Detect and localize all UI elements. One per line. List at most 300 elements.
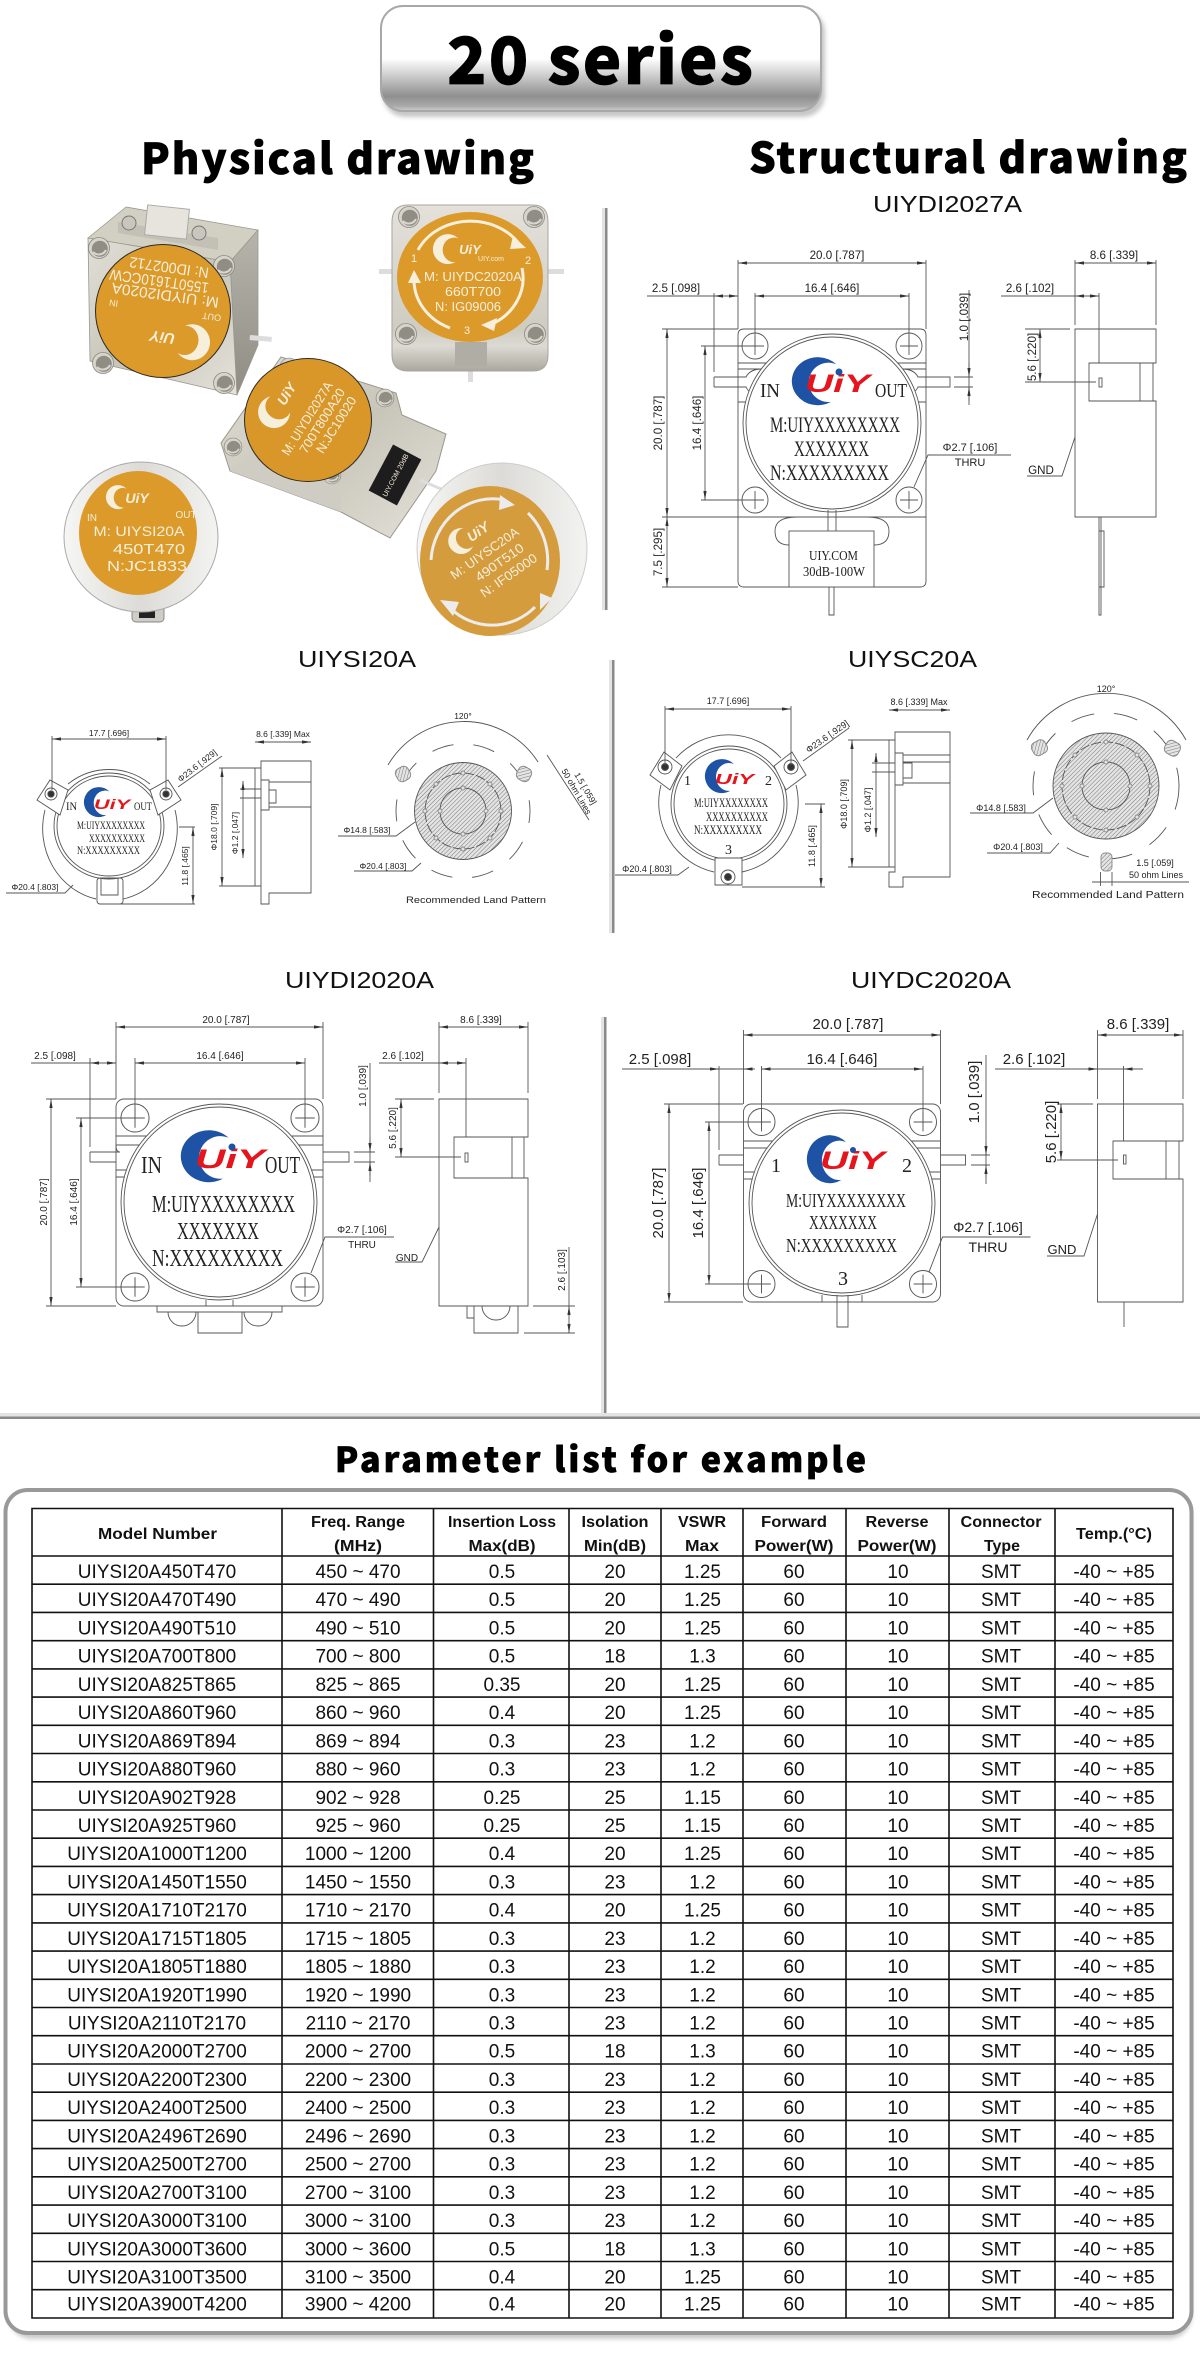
table: data rows: 60 [783,1872,805,1893]
table: data rows: 60 [783,1562,805,1583]
table: data rows: 1.2 [689,1929,716,1950]
table: data rows: -40 ~ +85 [1073,2239,1155,2260]
table: data rows: 825 ~ 865 [315,1675,401,1696]
drawing: UIYDI2027A: Φ2.7 [.106] [943,442,997,454]
table: data rows: 10 [887,2014,909,2034]
table: data rows: UIYSI20A2700T3100 [67,2183,247,2204]
table: data rows: -40 ~ +85 [1073,1788,1155,1809]
table: data rows: -40 ~ +85 [1073,1844,1155,1865]
drawing: UIYDI2027A: 8.6 [.339] [1090,249,1138,262]
table: data rows: -40 ~ +85 [1073,1901,1155,1922]
table: data rows: 60 [783,2183,805,2204]
table: data rows: 1.15 [684,1788,721,1809]
table: data rows: -40 ~ +85 [1073,1731,1155,1752]
table: data rows: 10 [887,1844,909,1865]
marking text: XXXXXXX [177,1219,259,1245]
table: header row: Isolation [582,1514,648,1531]
table: data rows: -40 ~ +85 [1073,1675,1155,1696]
table: data rows: UIYSI20A470T490 [78,1590,236,1611]
table: data rows: 10 [887,1788,909,1809]
heading: physical drawing: Physical drawing [141,126,534,187]
drawing: UIYDI2020A: GND [396,1253,418,1264]
table: data rows: -40 ~ +85 [1073,1618,1155,1639]
drawing: UIYSI20A: Recommended Land Pattern [406,894,546,905]
table: data rows: -40 ~ +85 [1073,2098,1155,2119]
table: data rows: UIYSI20A925T960 [78,1816,236,1837]
table: data rows: UIYSI20A1000T1200 [67,1844,247,1865]
marking text: XXXXXXX [794,436,869,461]
table: header row: VSWR [678,1514,726,1531]
table: data rows: 1.25 [684,1844,721,1865]
table: data rows: 23 [604,1731,626,1752]
drawing: UIYDC2020A: 8.6 [.339] [1107,1016,1169,1033]
table: data rows: UIYSI20A869T894 [78,1731,237,1752]
table: header row: Max [685,1538,719,1555]
table: data rows: 20 [604,1844,626,1865]
logo: UiY [94,796,133,812]
drawing: UIYDI2020A: 1.0 [.039] [358,1065,369,1107]
drawing: UIYDI2020A: THRU [348,1240,376,1251]
photo: UIYSC20A circulator: M: UIYSC20A [447,524,522,582]
drawing: UIYDI2027A [647,249,1156,615]
table: data rows: 0.3 [489,1985,515,2006]
table: data rows: 23 [604,1957,626,1978]
table: data rows: 23 [604,2211,626,2232]
marking text: IN [141,1153,162,1179]
table: data rows: 10 [887,2098,909,2119]
drawing: UIYSC20A: 1.5 [.059] [1136,858,1174,868]
table: data rows: 1710 ~ 2170 [305,1901,411,1922]
table: data rows: 1.25 [684,2268,721,2288]
logo: UiY [805,370,874,398]
table: header row: Freq. Range [311,1514,405,1531]
table: data rows: -40 ~ +85 [1073,1590,1155,1611]
drawing: UIYDI2020A: 16.4 [.646] [69,1178,80,1226]
table: data rows: 1.25 [684,2294,721,2316]
table: data rows: -40 ~ +85 [1073,1562,1155,1583]
table: data rows: -40 ~ +85 [1073,1703,1155,1724]
marking text: M:UIYXXXXXXXX [77,818,145,832]
table: data rows: 0.3 [489,2126,515,2147]
label: UIYDI2027A: UIYDI2027A [873,191,1023,217]
table: data rows: UIYSI20A3100T3500 [67,2268,247,2288]
photo: UIYDI2020A isolator [88,205,272,395]
photo: UIYSC20A circulator: UiY [464,517,493,545]
table: data rows: 1.3 [689,1647,716,1668]
table: data rows: 60 [783,2042,805,2063]
marking text: UIY.COM [809,549,858,564]
table: data rows: 18 [604,2042,626,2063]
table: data rows: 1.15 [684,1816,721,1837]
drawing: UIYDI2027A: 16.4 [.646] [805,282,859,295]
table: data rows: 0.4 [489,2294,516,2316]
photo: UIYDC2020A circulator: 1 [411,253,417,265]
table: data rows: 23 [604,2155,626,2176]
table: data rows: SMT [981,2126,1021,2147]
photo: UIYDI2020A isolator: M: UIYDI2020A [111,279,220,311]
table: data rows: -40 ~ +85 [1073,2268,1155,2288]
table: data rows: 20 [604,1901,626,1922]
table: data rows: 23 [604,2126,626,2147]
table: data rows: 1805 ~ 1880 [305,1957,411,1978]
table: data rows: 1.25 [684,1675,721,1696]
table: data rows: 25 [604,1788,626,1809]
drawing: UIYDC2020A: Φ2.7 [.106] [953,1219,1023,1235]
table: data rows: 2500 ~ 2700 [305,2155,411,2176]
marking text [771,1155,912,1290]
table: header row: Min(dB) [584,1538,646,1555]
table: data rows: 0.3 [489,1929,515,1950]
table: data rows: SMT [981,2070,1021,2091]
title button [381,6,825,117]
marking text [66,799,152,857]
label: UIYDC2020A: UIYDC2020A [851,967,1012,993]
photo: UIYDI2020A isolator: IN [108,297,119,309]
table: data rows: SMT [981,1760,1021,1780]
photo: UIYSI20A isolator: IN [87,513,97,524]
photo: UIYDI2020A isolator: N: ID002712 [128,253,210,281]
table: header row: Temp.(°C) [1076,1526,1152,1543]
photo: UIYDC2020A circulator: M: UIYDC2020A [424,269,522,284]
table: data rows: 20 [604,1618,626,1639]
table: data rows: 60 [783,2098,805,2119]
photo: UIYSC20A circulator: 490T510 [472,540,527,585]
marking text: 1 [684,774,691,789]
table: data rows: 0.4 [489,1844,516,1865]
table: data rows: -40 ~ +85 [1073,2070,1155,2091]
marking text: XXXXXXXXXX [706,809,768,824]
marking text [760,380,907,580]
table: data rows: 0.25 [484,1816,520,1837]
drawing: UIYSI20A: Φ20.4 [.803] [360,861,406,871]
drawing: UIYSI20A: 17.7 [.696] [89,728,129,738]
drawing: UIYDC2020A: 1.0 [.039] [966,1061,983,1123]
table: data rows: 2000 ~ 2700 [305,2042,411,2063]
table: data rows: 1.2 [689,1760,716,1780]
table: data rows: UIYSI20A1715T1805 [67,1929,247,1950]
table: data rows: 10 [887,1731,909,1752]
table: data rows: 1.2 [689,1985,716,2006]
marking text [684,774,772,858]
table: data rows: 60 [783,1901,805,1922]
table: data rows: 1.2 [689,1872,716,1893]
table: data rows: 60 [783,1618,805,1639]
marking text: M:UIYXXXXXXXX [770,412,900,437]
table: grid lines [32,1508,1173,2318]
table: data rows: SMT [981,2098,1021,2119]
photo: UIYDI2020A isolator: 1550T1610CCW [108,265,210,296]
photo: UIYSI20A isolator [64,462,218,622]
table: data rows: UIYSI20A2110T2170 [68,2014,246,2034]
table: data rows: SMT [981,1872,1021,1893]
logo: UiY [715,771,757,788]
table: header row: Power(W) [754,1538,834,1555]
table: data rows: 0.5 [489,1562,515,1583]
photo: UIYDC2020A circulator: 3 [464,325,470,337]
table: data rows: 23 [604,2014,626,2034]
table: data rows: 60 [783,2211,805,2232]
logo [807,1135,889,1183]
drawing: UIYSI20A [6,711,599,905]
drawing: UIYDI2027A: 2.6 [.102] [1006,282,1054,295]
table: data rows: 60 [783,1647,805,1668]
drawing: UIYSI20A: Φ23.6 [.929] [176,747,219,784]
drawing: UIYSI20A: 120° [454,711,472,721]
table: data rows: 10 [887,2239,909,2260]
marking text: N:XXXXXXXXX [152,1246,283,1272]
table: data rows: 60 [783,1703,805,1724]
table: data rows: 0.4 [489,1703,516,1724]
marking text: N:XXXXXXXXX [77,843,140,857]
table: data rows: SMT [981,1590,1021,1611]
table: data rows: 60 [783,1788,805,1809]
photo: UIYDC2020A circulator [379,205,564,382]
table: data rows: 1.2 [689,1731,716,1752]
table: data rows: 60 [783,2268,805,2288]
table: data rows: 1920 ~ 1990 [305,1985,411,2006]
drawing: UIYDC2020A: 2.5 [.098] [629,1051,691,1068]
table: header row: Connector [960,1514,1042,1531]
table: data rows: 1.2 [689,2070,716,2091]
table: data rows: 20 [604,2268,626,2288]
table: data rows: 902 ~ 928 [315,1788,401,1809]
drawing: UIYSC20A: Recommended Land Pattern [1032,890,1184,901]
table: data rows: 18 [604,2239,626,2260]
table: data rows: UIYSI20A1450T1550 [67,1872,247,1893]
drawing: UIYDI2027A: 1.0 [.039] [958,293,971,341]
table: data rows: 0.3 [489,2098,515,2119]
drawing: UIYSC20A: 8.6 [.339] Max [890,697,948,707]
marking text: M:UIYXXXXXXXX [694,795,768,810]
table: data rows: 1.25 [684,1618,721,1639]
table: data rows: 60 [783,1985,805,2006]
table: data rows: 860 ~ 960 [315,1703,401,1724]
table: data rows: UIYSI20A825T865 [78,1675,236,1696]
table: data rows: 23 [604,2183,626,2204]
table: data rows: 10 [887,1901,909,1922]
drawing: UIYDC2020A: 16.4 [.646] [690,1168,707,1238]
marking text: XXXXXXXXXX [89,831,145,845]
drawing: UIYSC20A: Φ1.2 [.047] [863,788,873,832]
drawing: UIYDI2020A: 8.6 [.339] [460,1015,502,1026]
marking text: OUT [265,1153,300,1179]
table: data rows: -40 ~ +85 [1073,2042,1155,2063]
table: data rows: 18 [604,1647,626,1668]
drawing: UIYDI2020A: 5.6 [.220] [388,1107,399,1149]
table: data rows: UIYSI20A2500T2700 [67,2155,247,2176]
table: data rows: 700 ~ 800 [315,1647,401,1668]
table: data rows: 0.3 [489,2183,515,2204]
drawing: UIYSI20A: Φ20.4 [.803] [12,882,58,892]
drawing: UIYSC20A [615,684,1189,901]
table: data rows: -40 ~ +85 [1073,1647,1155,1668]
table: data rows: 3900 ~ 4200 [305,2294,411,2316]
table: data rows: 1.3 [689,2239,716,2260]
table: data rows: 880 ~ 960 [315,1760,401,1780]
table: data rows: 60 [783,2014,805,2034]
table: data rows: 1715 ~ 1805 [305,1929,411,1950]
table: data rows: 10 [887,1957,909,1978]
logo: UiY [820,1147,889,1175]
table: data rows: 2496 ~ 2690 [305,2126,411,2147]
drawing: UIYDI2027A: THRU [955,457,985,469]
table: data rows: 0.3 [489,2014,515,2034]
drawing: UIYDI2027A: GND [1028,464,1054,477]
table: data rows: 1.2 [689,1957,716,1978]
table: data rows: 10 [887,2268,909,2288]
drawing: UIYSC20A: Φ20.4 [.803] [622,864,672,874]
table: data rows: 1.2 [689,2126,716,2147]
table: data rows: 0.5 [489,2042,515,2063]
marking text: 2 [765,774,772,789]
table: data rows: 0.5 [489,1590,515,1611]
drawing: UIYDI2027A: 16.4 [.646] [691,396,704,450]
photo: UIYDC2020A circulator: N: IG09006 [435,299,501,314]
marking text: IN [66,799,77,813]
logo [84,787,133,817]
table: data rows: 60 [783,1675,805,1696]
marking text: XXXXXXX [809,1212,877,1234]
table: data rows: -40 ~ +85 [1073,2211,1155,2232]
table: data rows: 1.2 [689,2183,716,2204]
table: data rows: 1000 ~ 1200 [305,1844,411,1865]
photo: UIYSI20A isolator: OUT [175,510,197,521]
table: data rows: 25 [604,1816,626,1837]
table: data rows: SMT [981,1675,1021,1696]
table: data rows: 23 [604,1760,626,1780]
drawing: UIYDI2020A: 16.4 [.646] [196,1051,244,1062]
table: data rows: 10 [887,2042,909,2063]
table: data rows: -40 ~ +85 [1073,2126,1155,2147]
drawing: UIYDC2020A: 5.6 [.220] [1043,1101,1060,1163]
table: data rows: 1.2 [689,2014,716,2034]
marking text: 1 [771,1155,781,1177]
photo: UIYDI2027A isolator with attenuator: UiY [274,378,300,408]
table: data rows [67,1562,1155,2316]
drawing: UIYSI20A: Φ14.8 [.583] [344,825,390,835]
table: data rows: 2110 ~ 2170 [306,2014,410,2034]
photo: UIYSI20A isolator: M: UIYSI20A [94,523,185,539]
table: data rows: 60 [783,1816,805,1837]
heading: parameter list: Parameter list for example [335,1433,866,1482]
table: data rows: 1.25 [684,1901,721,1922]
table: data rows: SMT [981,1562,1021,1583]
drawing: UIYSC20A: 17.7 [.696] [707,696,749,706]
drawing: UIYDC2020A: 20.0 [.787] [650,1168,667,1238]
photo: UIYSI20A isolator: 450T470 [113,541,185,558]
table: data rows: 0.5 [489,2239,515,2260]
table: data rows: 60 [783,2239,805,2260]
table: data rows: UIYSI20A450T470 [78,1562,236,1583]
table: data rows: UIYSI20A3900T4200 [67,2294,247,2316]
table: data rows: 1.25 [684,1703,721,1724]
table: header row: Power(W) [858,1538,936,1555]
table: data rows: 0.4 [489,1901,516,1922]
table: data rows: 0.4 [489,2268,516,2288]
table: data rows: -40 ~ +85 [1073,1760,1155,1780]
drawing: UIYDI2027A: 2.5 [.098] [652,282,700,295]
table: data rows: 2400 ~ 2500 [305,2098,411,2119]
table: data rows: 1450 ~ 1550 [305,1872,411,1893]
photo: UIYSI20A isolator: UiY [125,490,150,506]
table: data rows: -40 ~ +85 [1073,2014,1155,2034]
table: data rows: SMT [981,1788,1021,1809]
drawing: UIYDC2020A: 16.4 [.646] [807,1051,877,1068]
table: data rows: 60 [783,1957,805,1978]
drawing: UIYDI2027A: 20.0 [.787] [810,249,864,262]
photo: UIYDI2027A isolator with attenuator: 700T800A20 [296,385,348,456]
marking text: 3 [838,1268,848,1290]
table: header row: Reverse [866,1514,929,1531]
table: data rows: SMT [981,2042,1021,2063]
table: data rows: 925 ~ 960 [315,1816,401,1837]
table: data rows: UIYSI20A3000T3600 [67,2239,247,2260]
table: data rows: 60 [783,1760,805,1780]
marking text: M:UIYXXXXXXXX [152,1192,295,1218]
table: header row: Max(dB) [468,1538,536,1555]
photo: UIYSC20A circulator [417,463,587,636]
table: data rows: 60 [783,2294,805,2316]
table: header row: Type [984,1538,1020,1555]
drawing: UIYDI2020A [31,1015,575,1333]
label: UIYDI2020A: UIYDI2020A [285,967,435,993]
photo: UIYDC2020A circulator: UiY [459,242,482,257]
table: data rows: 10 [887,1618,909,1639]
table: data rows: UIYSI20A2000T2700 [67,2042,247,2063]
table: data rows: 3100 ~ 3500 [305,2268,411,2288]
table: data rows: 60 [783,1844,805,1865]
table: data rows: 60 [783,1731,805,1752]
table: data rows: UIYSI20A1710T2170 [67,1901,247,1922]
photo: UIYDC2020A circulator: UIY.com [478,256,504,263]
table: data rows: -40 ~ +85 [1073,1816,1155,1837]
table: data rows: -40 ~ +85 [1073,1872,1155,1893]
logo [705,759,757,793]
table: data rows: 10 [887,1647,909,1668]
photo: UIYDI2027A isolator with attenuator [221,357,460,538]
photo: UIYDC2020A circulator: 660T700 [445,284,501,299]
table: data rows: SMT [981,1816,1021,1837]
drawing: UIYDI2020A: 20.0 [.787] [39,1178,50,1226]
table: data rows: UIYSI20A1920T1990 [67,1985,247,2006]
marking text: 30dB-100W [803,565,866,580]
table: data rows: 1.2 [689,2098,716,2119]
table: header row: (MHz) [334,1538,382,1555]
table: data rows: UIYSI20A2400T2500 [67,2098,247,2119]
table: data rows: UIYSI20A2496T2690 [67,2126,247,2147]
table: data rows: 10 [887,2126,909,2147]
drawing: UIYSC20A: 50 ohm Lines [1129,870,1184,880]
table: data rows: 60 [783,2070,805,2091]
table: data rows: 2200 ~ 2300 [305,2070,411,2091]
table: data rows: 20 [604,1703,626,1724]
marking text: N:XXXXXXXXX [770,460,889,485]
table: data rows: SMT [981,2155,1021,2176]
marking text: OUT [875,380,907,402]
table: data rows: UIYSI20A860T960 [78,1703,236,1724]
drawing: UIYSI20A: Φ18.0 [.709] [209,804,219,850]
photo: UIYSC20A circulator: N: IF05000 [477,550,540,600]
table: data rows: 10 [887,1929,909,1950]
drawing: UIYSC20A: 120° [1097,684,1116,694]
drawing: UIYSI20A: 11.8 [.465] [180,846,190,886]
marking text: OUT [134,799,152,813]
photo: UIYDI2020A isolator: UiY [147,326,176,347]
table: data rows: 869 ~ 894 [315,1731,401,1752]
marking text: N:XXXXXXXXX [786,1235,897,1257]
drawing: UIYSI20A: 1.5 [.059] [572,771,599,806]
table: data rows: UIYSI20A902T928 [78,1788,236,1809]
